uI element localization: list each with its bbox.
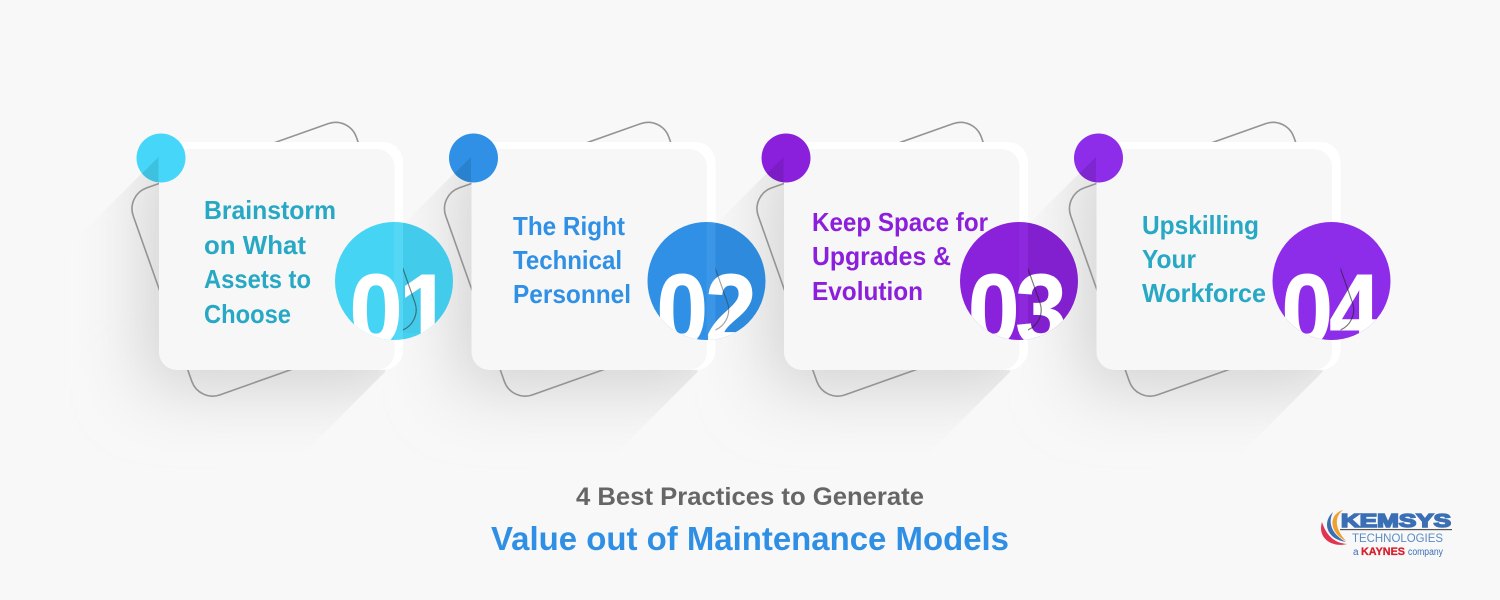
card 04 text: [1142, 210, 1266, 308]
icon: logo swoosh: [1321, 510, 1347, 545]
panel: card 03 upgrades and evolution: [751, 116, 1080, 402]
panel: card 02 technical personnel: [438, 116, 768, 402]
card 04 text: Upskilling: [1142, 210, 1259, 240]
card 02 text: [513, 211, 631, 309]
logo: Kemsys Technologies: KAYNES: [1361, 546, 1405, 558]
card 01 text: Choose: [204, 299, 291, 329]
card 01 text: on What: [204, 230, 306, 260]
panel: card 04 upskilling workforce: 04: [1282, 254, 1381, 366]
card 03 text: Evolution: [812, 276, 923, 306]
panel: card 02 technical personnel: 02: [657, 254, 757, 366]
title: [491, 483, 1009, 557]
title: Value out of Maintenance Models: [491, 520, 1009, 557]
panel: card 01 brainstorm: 01: [350, 254, 452, 366]
logo: Kemsys Technologies: TECHNOLOGIES: [1352, 531, 1443, 545]
card 02 text: The Right: [513, 211, 625, 241]
card 03 text: [812, 207, 988, 306]
logo: Kemsys Technologies: company: [1408, 547, 1443, 558]
card 03 text: Upgrades &: [812, 241, 951, 271]
card 03 text: Keep Space for: [812, 207, 988, 237]
logo: Kemsys Technologies: a: [1353, 547, 1359, 558]
card 01 text: Assets to: [204, 264, 311, 294]
panel: card 04 upskilling workforce: [1063, 116, 1390, 402]
card 02 text: Personnel: [513, 279, 631, 309]
card 04 text: Your: [1142, 244, 1196, 274]
panel: card 03 upgrades and evolution: 03: [968, 254, 1067, 366]
card 01 text: Brainstorm: [204, 195, 336, 225]
panel: card 01 brainstorm: [126, 116, 455, 402]
title: 4 Best Practices to Generate: [576, 483, 924, 511]
card 02 text: Technical: [513, 245, 622, 275]
card 01 text: [204, 195, 336, 329]
logo: Kemsys Technologies: [1321, 510, 1452, 558]
logo: Kemsys Technologies: KEMSYS: [1341, 511, 1451, 531]
card 04 text: Workforce: [1142, 278, 1266, 308]
